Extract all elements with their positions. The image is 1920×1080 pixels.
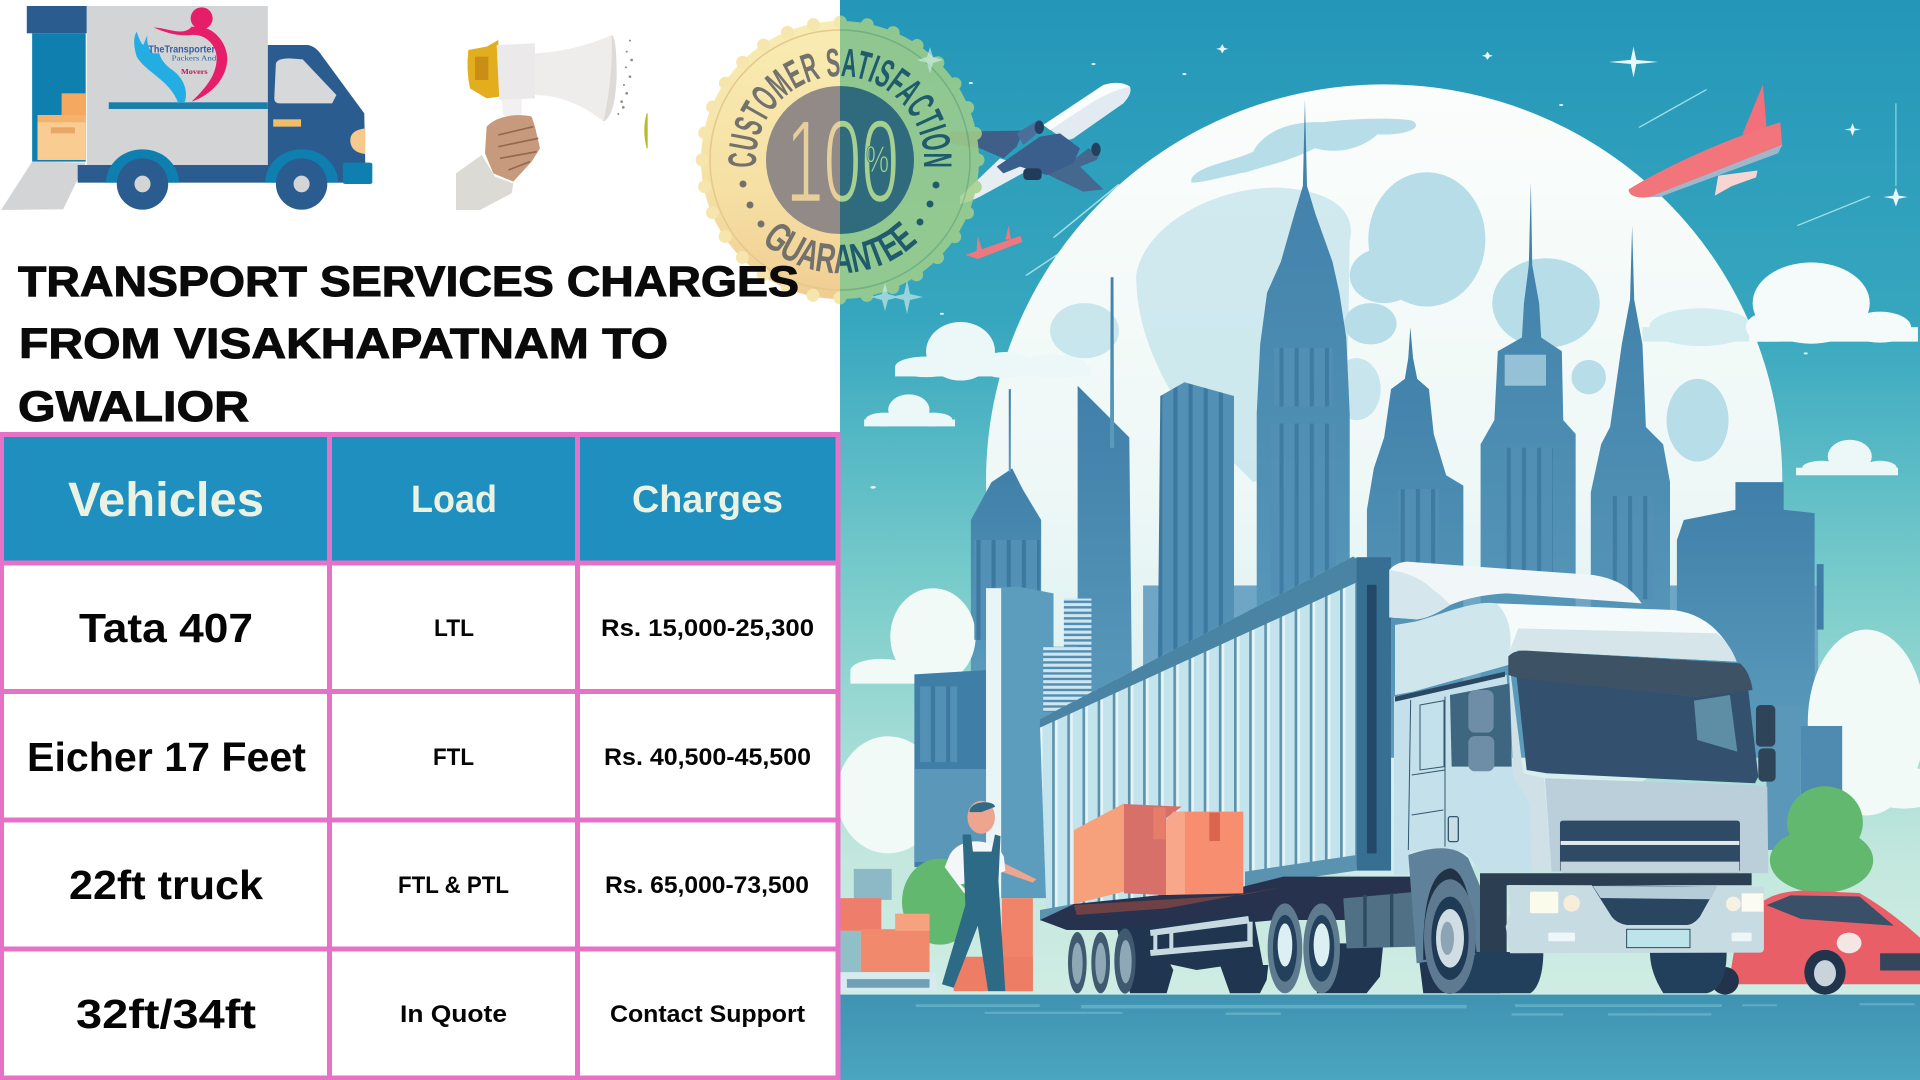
wheel arch <box>1408 848 1487 963</box>
row: 22ft truck <box>69 862 809 908</box>
row: Eicher 17 Feet: FTL <box>433 744 474 771</box>
icon: red airplane <box>1629 84 1782 197</box>
streaks <box>1026 90 1896 276</box>
panel: left white background <box>0 0 840 1080</box>
header: charges: Charges <box>632 479 783 521</box>
under bumper dark strip <box>1480 873 1752 953</box>
moon craters <box>1050 119 1729 482</box>
row: Tata 407: LTL <box>434 615 474 642</box>
title line 3: GWALIOR <box>18 383 249 431</box>
front panel <box>1545 778 1768 873</box>
row: 32ft/34ft: 32ft/34ft <box>76 991 256 1037</box>
lower tyres <box>1650 952 1727 993</box>
door handle <box>1448 817 1458 842</box>
ground <box>833 995 1920 1080</box>
header row <box>68 474 783 527</box>
cargo boxes on the ground <box>840 898 1033 991</box>
boxes on trailer <box>1074 803 1243 904</box>
row: Tata 407: Rs. 15,000-25,300 <box>601 615 814 642</box>
seal dots <box>740 180 940 228</box>
header: vehicles: Vehicles <box>68 474 264 527</box>
windshield <box>1517 677 1758 783</box>
container bottom rail <box>1245 855 1357 887</box>
cab upper side <box>1395 603 1518 695</box>
header: load: Load <box>411 479 497 521</box>
title <box>18 258 799 431</box>
skyline filler behind towers <box>1143 585 1818 758</box>
icon: hand holding megaphone <box>456 35 648 210</box>
illustration: city, moon and truck scene <box>833 0 1920 1080</box>
side mirrors <box>1468 690 1776 782</box>
skyline buildings <box>971 100 1815 758</box>
seal centre number: 100 <box>786 96 899 228</box>
table body background <box>0 563 840 1080</box>
fog lamps and plate <box>1548 929 1752 948</box>
upper scene: moon, planes and skyline <box>864 44 1918 876</box>
windshield pillar <box>1509 675 1552 872</box>
seal inner disc <box>766 86 914 234</box>
truck cab <box>1389 562 1776 994</box>
trees <box>902 786 1873 945</box>
row: 32ft/34ft: Contact Support <box>610 1001 805 1028</box>
logo: person and heart <box>153 7 227 102</box>
row: Eicher 17 Feet <box>27 734 811 780</box>
row: Tata 407 <box>79 605 814 651</box>
seal arc text bottom: GUARANTEE <box>766 221 918 274</box>
logo text: TheTransporter <box>148 45 215 56</box>
clouds <box>864 262 1918 475</box>
icon: white airplane <box>950 83 1131 204</box>
lower clouds <box>837 588 1920 853</box>
title line 1: TRANSPORT SERVICES CHARGES <box>18 258 799 306</box>
row: Eicher 17 Feet: Rs. 40,500-45,500 <box>604 744 811 771</box>
logo subtext: Movers <box>181 68 208 76</box>
cab lower side <box>1394 675 1533 875</box>
title line 2: FROM VISAKHAPATNAM TO <box>19 320 668 368</box>
sound marks <box>617 40 633 115</box>
logo: hand <box>134 32 186 103</box>
headlights <box>1530 892 1763 913</box>
badge: customer satisfaction seal <box>696 16 984 314</box>
row: 22ft truck: 22ft truck <box>69 862 263 908</box>
tower window details <box>1270 348 1653 599</box>
logo <box>134 7 227 103</box>
background towers <box>854 540 1842 900</box>
container <box>1040 557 1391 919</box>
logo subtext: Packers And <box>172 54 217 63</box>
seal sparkles <box>871 47 943 314</box>
row: 22ft truck: FTL & PTL <box>398 872 509 899</box>
fuel tank <box>1343 892 1418 948</box>
moon <box>986 84 1782 876</box>
table header background <box>0 434 840 563</box>
front bumper <box>1506 885 1764 953</box>
row: 32ft/34ft <box>76 991 805 1037</box>
row: 22ft truck: Rs. 65,000-73,500 <box>605 872 809 899</box>
roof fairing <box>1389 562 1642 619</box>
icon: moving truck with company logo <box>1 6 372 210</box>
icon: stars <box>870 44 1908 489</box>
gold sliver <box>644 113 648 148</box>
seal arc text top: CUSTOMER SATISFACTION <box>728 48 952 167</box>
row: 32ft/34ft: In Quote <box>400 1001 507 1028</box>
tandem wheels <box>1268 903 1340 993</box>
table: vehicle charges <box>0 434 840 1080</box>
grille <box>1560 821 1740 872</box>
seal percent sign: % <box>866 139 889 181</box>
side windows <box>1450 683 1512 767</box>
worker <box>942 801 1036 991</box>
front wheel <box>1424 879 1476 994</box>
truck undercarriage, boxes and wheels <box>1040 803 1500 994</box>
icon: small airplane <box>965 226 1023 259</box>
sun visor <box>1508 651 1753 697</box>
cab roof front <box>1497 603 1737 662</box>
trailer wheels <box>1068 928 1136 994</box>
trailer bed <box>1040 877 1430 930</box>
side guard <box>1150 916 1253 956</box>
road marks <box>916 1003 1915 1016</box>
lower scene: background buildings, clouds, worker and car <box>833 540 1920 1080</box>
bumper intake <box>1592 885 1717 925</box>
row: Tata 407: Tata 407 <box>79 605 253 651</box>
dark axle blocks <box>1117 927 1173 993</box>
car <box>1711 891 1920 995</box>
row: Eicher 17 Feet: Eicher 17 Feet <box>27 734 306 780</box>
